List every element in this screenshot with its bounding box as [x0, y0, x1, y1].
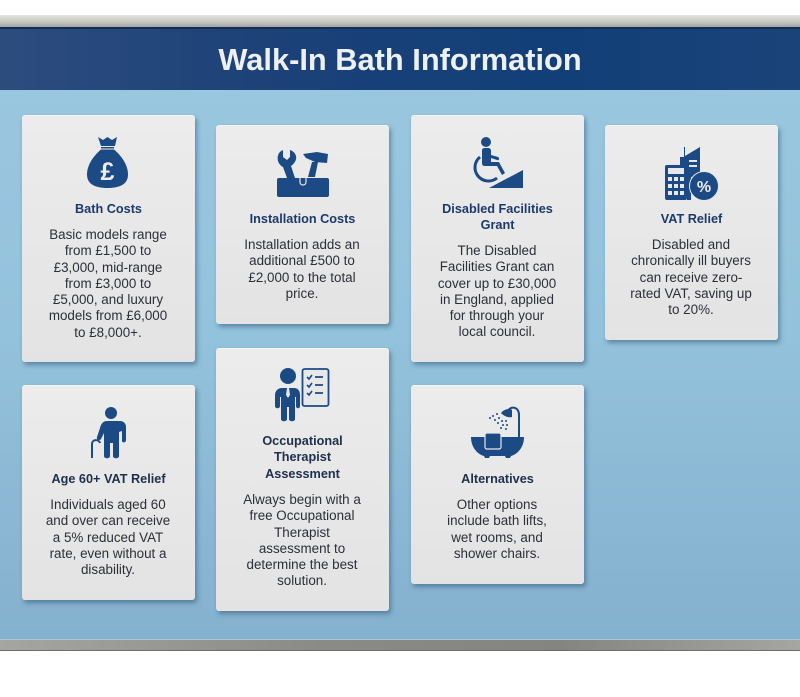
body text: models from £6,000 [49, 308, 167, 323]
icon: calculator, building and percent [665, 147, 718, 200]
body text [243, 492, 361, 588]
panel: age 60+ VAT relief [22, 385, 195, 600]
body text: Disabled and [652, 237, 730, 252]
heading: Alternatives [461, 472, 534, 486]
body text: rate, even without a [50, 546, 166, 561]
body text [438, 243, 556, 339]
body text: in England, applied [440, 292, 554, 307]
body text: local council. [459, 324, 535, 339]
body text: £5,000, and luxury [53, 292, 163, 307]
body text: Always begin with a [243, 492, 361, 507]
body text: Facilities Grant can [440, 259, 554, 274]
heading: Grant [481, 218, 514, 232]
heading: VAT Relief [661, 212, 722, 226]
icon: tools in toolbox [277, 150, 329, 197]
top metal frame [0, 15, 800, 27]
body text: cover up to £30,000 [438, 276, 556, 291]
body text [49, 227, 167, 340]
body text: £3,000, mid-range [54, 260, 162, 275]
body text: price. [286, 286, 318, 301]
heading: Assessment [265, 467, 340, 481]
heading: Occupational [262, 434, 343, 448]
body text: and over can receive [46, 513, 170, 528]
title: Walk-In Bath Information [218, 42, 582, 77]
icon: money bag with pound sign [87, 137, 128, 188]
body text: from £1,500 to [65, 243, 151, 258]
body text [447, 497, 547, 561]
body text: shower chairs. [454, 546, 540, 561]
heading: Disabled Facilities [442, 202, 553, 216]
panel: disabled facilities grant [411, 115, 584, 362]
body text: for through your [450, 308, 544, 323]
body text: wet rooms, and [451, 530, 543, 545]
icon: bath with shower [471, 406, 524, 458]
panel: VAT relief [605, 125, 778, 340]
body text: can receive zero- [640, 270, 742, 285]
body text: from £3,000 to [65, 276, 151, 291]
body text: to £8,000+. [74, 325, 142, 340]
body text: include bath lifts, [447, 513, 547, 528]
body text: chronically ill buyers [631, 253, 751, 268]
heading: Therapist [274, 450, 331, 464]
heading: Bath Costs [75, 202, 142, 216]
panel: bath costs [22, 115, 195, 362]
header banner [0, 27, 800, 90]
body text: Therapist [274, 525, 330, 540]
body text: to 20%. [668, 302, 714, 317]
icon: calculator, building and percent: % [697, 179, 711, 196]
body text: solution. [277, 573, 327, 588]
icon: therapist with checklist [275, 368, 330, 422]
body text: determine the best [247, 557, 357, 572]
body text [244, 237, 360, 301]
heading [442, 202, 553, 232]
heading [262, 434, 343, 481]
panel: occupational therapist assessment [216, 348, 389, 611]
body text [46, 497, 170, 577]
body text [630, 237, 752, 317]
body text: free Occupational [250, 508, 354, 523]
body text: rated VAT, saving up [630, 286, 752, 301]
heading: Installation Costs [250, 212, 355, 226]
body text: assessment to [259, 541, 345, 556]
body text: Basic models range [49, 227, 167, 242]
icon: wheelchair on ramp [474, 137, 523, 188]
body text: a 5% reduced VAT [53, 530, 163, 545]
panel: alternatives [411, 385, 584, 584]
body text: The Disabled [458, 243, 536, 258]
bottom metal frame [0, 639, 800, 651]
body text: £2,000 to the total [248, 270, 356, 285]
body text: Other options [457, 497, 537, 512]
icon: money bag with pound sign: £ [101, 158, 115, 186]
body text: disability. [81, 562, 135, 577]
body text: additional £500 to [249, 253, 355, 268]
body text: Individuals aged 60 [50, 497, 166, 512]
heading: Age 60+ VAT Relief [51, 472, 166, 486]
icon: older person with cane [91, 407, 126, 458]
body text: Installation adds an [244, 237, 360, 252]
panel: installation costs [216, 125, 389, 324]
